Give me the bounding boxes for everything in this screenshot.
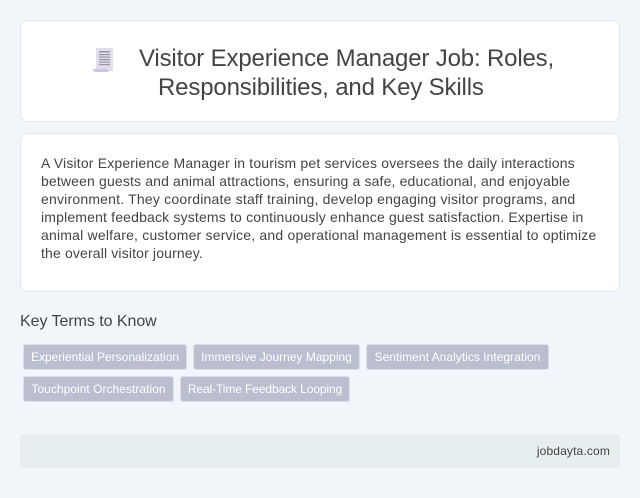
tag (366, 344, 549, 370)
panel: description card (20, 133, 620, 292)
text block: description: animal welfare, customer service, and operational management is essential to optimize (41, 227, 596, 243)
text block: description: between guests and animal attractions, ensuring a safe, educational, and enjoyable (41, 173, 570, 189)
tag: Touchpoint Orchestration (31, 382, 166, 396)
tag: Immersive Journey Mapping (201, 350, 352, 364)
tag: Real-Time Feedback Looping (188, 382, 342, 396)
text block: description: A Visitor Experience Manager in tourism pet services oversees the daily interactions (41, 155, 575, 171)
footer source text: jobdayta.com (537, 444, 610, 458)
footer bar (20, 434, 620, 468)
tag (23, 376, 174, 402)
title: Responsibilities, and Key Skills (158, 74, 484, 101)
text block: description: implement feedback systems to continuously enhance guest satisfaction. Expertise in (41, 209, 584, 225)
tag list (23, 344, 549, 402)
tag (193, 344, 360, 370)
text block: description: environment. They coordinate staff training, develop engaging visitor programs, and (41, 191, 575, 207)
title: Visitor Experience Manager Job: Roles, (139, 45, 554, 72)
tag (23, 344, 187, 370)
text block: description (41, 155, 596, 261)
icon: document scroll (93, 48, 113, 72)
panel: title card (20, 20, 620, 122)
title (139, 45, 554, 101)
tag (180, 376, 350, 402)
tag: Sentiment Analytics Integration (375, 350, 540, 364)
heading: key terms: Key Terms to Know (20, 313, 157, 330)
tag: Experiential Personalization (31, 350, 179, 364)
text block: description: the overall visitor journey. (41, 245, 203, 261)
